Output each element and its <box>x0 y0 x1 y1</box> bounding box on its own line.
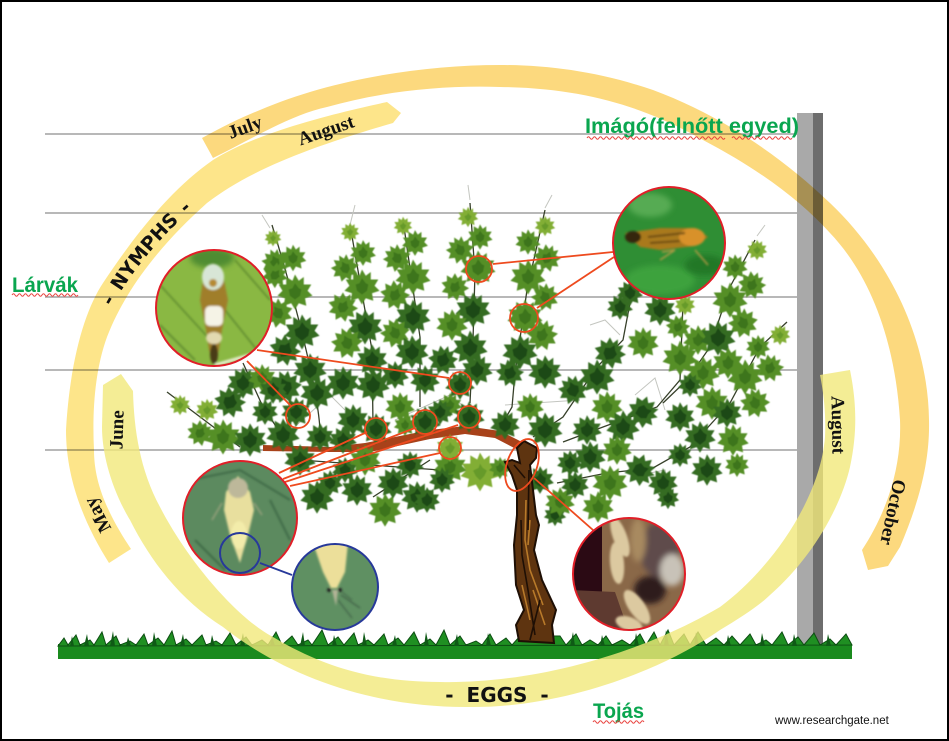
callout connector lines <box>247 252 614 530</box>
label: larvae: Lárvák <box>12 274 78 297</box>
grass strip <box>58 630 852 659</box>
photo: eggs under bark <box>572 517 686 631</box>
trellis wires <box>45 134 800 450</box>
photo: adult leafhopper <box>610 185 730 305</box>
label: eggs: - EGGS - <box>445 683 549 707</box>
trunk <box>505 441 556 643</box>
label: June: June <box>106 410 129 450</box>
vine shoots <box>167 203 787 497</box>
label: August, top: August <box>295 111 358 150</box>
source credit: www.researchgate.net <box>774 715 890 727</box>
leaves <box>170 207 790 527</box>
photo: enlarged nymph tail <box>290 542 380 632</box>
cycle band: June, eggs, August <box>102 370 855 707</box>
label: August, right: August <box>826 396 849 455</box>
photo: pale nymph on leaf, lower <box>180 458 300 578</box>
label: nymphs: - NYMPHS - <box>106 204 188 304</box>
label: adult: Imágó(felnőtt egyed) <box>585 115 799 138</box>
blue target circle on nymph tail <box>220 533 260 573</box>
label: eggs in Hungarian: Tojás <box>593 700 644 723</box>
cycle band: July, adults, October <box>202 65 929 570</box>
label: July: July <box>225 112 266 144</box>
label: October: October <box>875 477 910 547</box>
blue connector line <box>260 563 292 575</box>
cordon branch <box>263 426 524 452</box>
photo: nymph on leaf, upper <box>155 249 273 367</box>
small target circles on the vine <box>286 256 545 496</box>
grapevine <box>167 185 790 643</box>
cycle band: May, nymphs, August <box>66 102 401 563</box>
label: May: May <box>80 493 116 536</box>
tendrils <box>262 185 765 505</box>
trellis post <box>797 113 823 645</box>
